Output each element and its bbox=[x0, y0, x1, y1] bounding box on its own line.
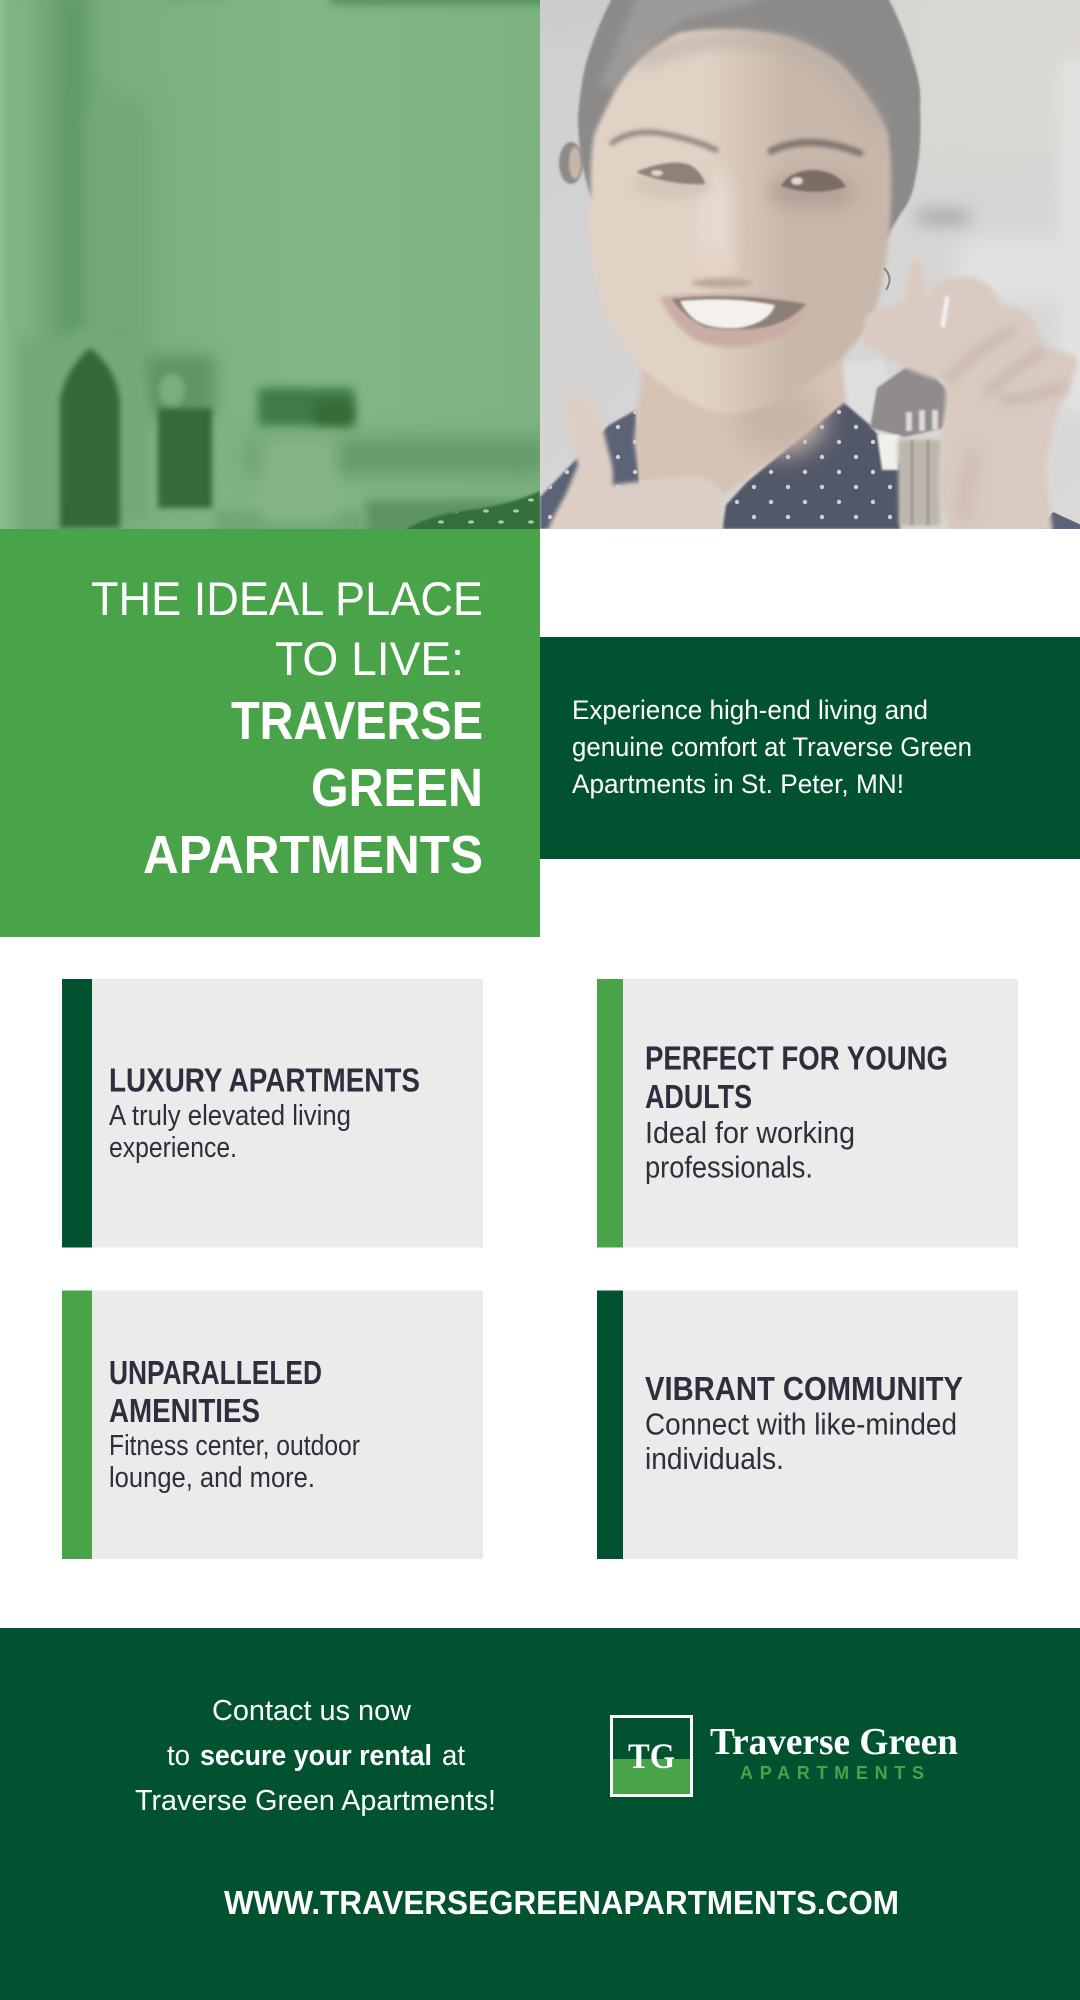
intro text: Apartments in St. Peter, MN! bbox=[572, 769, 904, 799]
mouth bbox=[660, 294, 809, 348]
card text bbox=[109, 1430, 360, 1494]
call to action: to bbox=[167, 1740, 190, 1772]
call to action: Contact us now bbox=[212, 1695, 412, 1727]
heading: light lines bbox=[91, 572, 483, 685]
logo tagline: APARTMENTS bbox=[740, 1763, 924, 1783]
panel: title bbox=[0, 529, 540, 937]
logo mark bbox=[612, 1716, 692, 1796]
shirt left bbox=[540, 410, 640, 529]
raised hand holding keys bbox=[863, 257, 1077, 532]
photo background bbox=[540, 0, 1080, 529]
card text: A truly elevated living bbox=[109, 1100, 351, 1132]
card heading: UNPARALLELED bbox=[109, 1354, 322, 1391]
logo wordmark: Traverse Green bbox=[710, 1721, 958, 1763]
thumbs up hand bbox=[547, 392, 722, 532]
neck bbox=[634, 350, 845, 495]
card heading bbox=[645, 1040, 948, 1115]
photo: green tinted blurred interior bbox=[0, 0, 555, 540]
card text bbox=[645, 1406, 957, 1476]
logo bbox=[612, 1716, 958, 1796]
call to action: Traverse Green Apartments! bbox=[135, 1785, 496, 1817]
card text: professionals. bbox=[645, 1150, 813, 1184]
call to action: secure your rental bbox=[200, 1740, 432, 1772]
card: vibrant community bbox=[597, 1290, 1018, 1559]
finger creases bbox=[946, 330, 1065, 400]
card heading: VIBRANT COMMUNITY bbox=[645, 1370, 963, 1407]
heading: light lines: TO LIVE: bbox=[275, 632, 464, 685]
heading: bold lines: APARTMENTS bbox=[143, 825, 483, 885]
intro text bbox=[572, 695, 972, 799]
card text: Ideal for working bbox=[645, 1115, 855, 1150]
card text: Connect with like-minded bbox=[645, 1406, 957, 1442]
website url: WWW.TRAVERSEGREENAPARTMENTS.COM bbox=[224, 1884, 899, 1921]
card: luxury apartments bbox=[62, 979, 483, 1248]
card heading: LUXURY APARTMENTS bbox=[109, 1062, 420, 1098]
card heading: AMENITIES bbox=[109, 1392, 260, 1429]
card heading bbox=[109, 1354, 322, 1429]
logo mark: TG bbox=[628, 1736, 675, 1776]
panel: intro bbox=[540, 637, 1080, 859]
card text bbox=[645, 1115, 855, 1184]
eyes bbox=[636, 163, 705, 184]
card heading: PERFECT FOR YOUNG bbox=[645, 1040, 948, 1076]
eye socket shadows bbox=[636, 177, 710, 196]
white blur behind keys bbox=[846, 363, 884, 412]
eyebrows bbox=[612, 132, 716, 150]
left ear bbox=[559, 142, 583, 184]
card text: individuals. bbox=[645, 1441, 784, 1476]
call to action: at bbox=[442, 1740, 465, 1772]
heading: light lines: THE IDEAL PLACE bbox=[91, 572, 483, 625]
footer panel bbox=[0, 1628, 1080, 2000]
card text bbox=[109, 1100, 351, 1164]
keys bbox=[877, 435, 899, 470]
call to action bbox=[135, 1695, 496, 1817]
key ring bbox=[943, 298, 947, 325]
hairline shadow bbox=[640, 39, 880, 130]
card text: experience. bbox=[109, 1132, 237, 1164]
heading: bold lines: TRAVERSE bbox=[231, 691, 483, 751]
shirt right bbox=[722, 402, 901, 529]
card text: lounge, and more. bbox=[109, 1462, 315, 1494]
card heading: ADULTS bbox=[645, 1078, 752, 1115]
card: unparalleled amenities bbox=[62, 1290, 483, 1559]
house shaped key fob bbox=[869, 366, 948, 438]
nose bridge highlight bbox=[706, 180, 733, 248]
intro text: genuine comfort at Traverse Green bbox=[572, 732, 972, 762]
intro text: Experience high-end living and bbox=[572, 695, 928, 725]
hair bbox=[578, 0, 920, 240]
card text: Fitness center, outdoor bbox=[109, 1430, 360, 1462]
photo: smiling woman holding house keys bbox=[540, 0, 1080, 532]
dress bbox=[406, 490, 540, 529]
face bbox=[589, 29, 891, 413]
heading: bold lines: GREEN bbox=[311, 758, 483, 818]
card: perfect for young adults bbox=[597, 979, 1018, 1248]
heading: bold lines bbox=[143, 691, 483, 885]
